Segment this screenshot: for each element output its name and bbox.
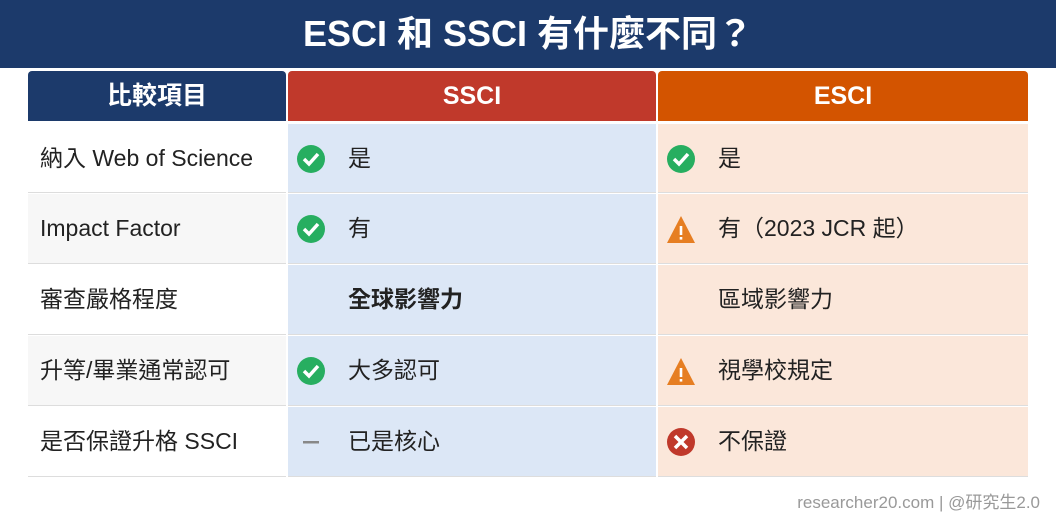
row 5 SSCI: 已是核心 (348, 428, 440, 454)
header: item (28, 71, 286, 121)
row 2 label: Impact Factor (40, 215, 181, 241)
header: SSCI: SSCI (443, 82, 501, 110)
row 2 ESCI (658, 194, 1028, 264)
row 1 label (28, 124, 286, 193)
row 2 ESCI: 有（2023 JCR 起） (718, 215, 919, 241)
row 4 SSCI: 大多認可 (348, 357, 440, 383)
row 1 ESCI (658, 124, 1028, 193)
row 3 label (28, 265, 286, 335)
row 1 ESCI: 是 (718, 145, 741, 171)
row 2 SSCI (288, 194, 656, 264)
header: item: 比較項目 (107, 82, 207, 110)
row 4 label: 升等/畢業通常認可 (40, 357, 230, 383)
header: ESCI: ESCI (814, 82, 872, 110)
title: ESCI 和 SSCI 有什麼不同？ (303, 13, 753, 54)
row 4 label (28, 336, 286, 406)
row 1 label: 納入 Web of Science (40, 145, 253, 171)
row 3 ESCI (658, 265, 1028, 335)
footer credit: researcher20.com | @研究生2.0 (797, 493, 1040, 512)
row 3 ESCI: 區域影響力 (718, 286, 833, 312)
header: SSCI (288, 71, 656, 121)
row 4 ESCI: 視學校規定 (718, 357, 833, 383)
row 4 SSCI (288, 336, 656, 406)
row 3 SSCI (288, 265, 656, 335)
row 1 SSCI (288, 124, 656, 193)
row 5 label (28, 407, 286, 477)
header: ESCI (658, 71, 1028, 121)
row 3 SSCI: 全球影響力 (348, 286, 463, 312)
row 2 label (28, 194, 286, 264)
row 5 ESCI (658, 407, 1028, 477)
row 5 ESCI: 不保證 (718, 428, 787, 454)
row 5 SSCI (288, 407, 656, 477)
row 3 label: 審查嚴格程度 (40, 286, 178, 312)
title (0, 0, 1056, 68)
row 4 ESCI (658, 336, 1028, 406)
row 5 label: 是否保證升格 SSCI (40, 428, 238, 454)
row 2 SSCI: 有 (348, 215, 371, 241)
row 1 SSCI: 是 (348, 145, 371, 171)
